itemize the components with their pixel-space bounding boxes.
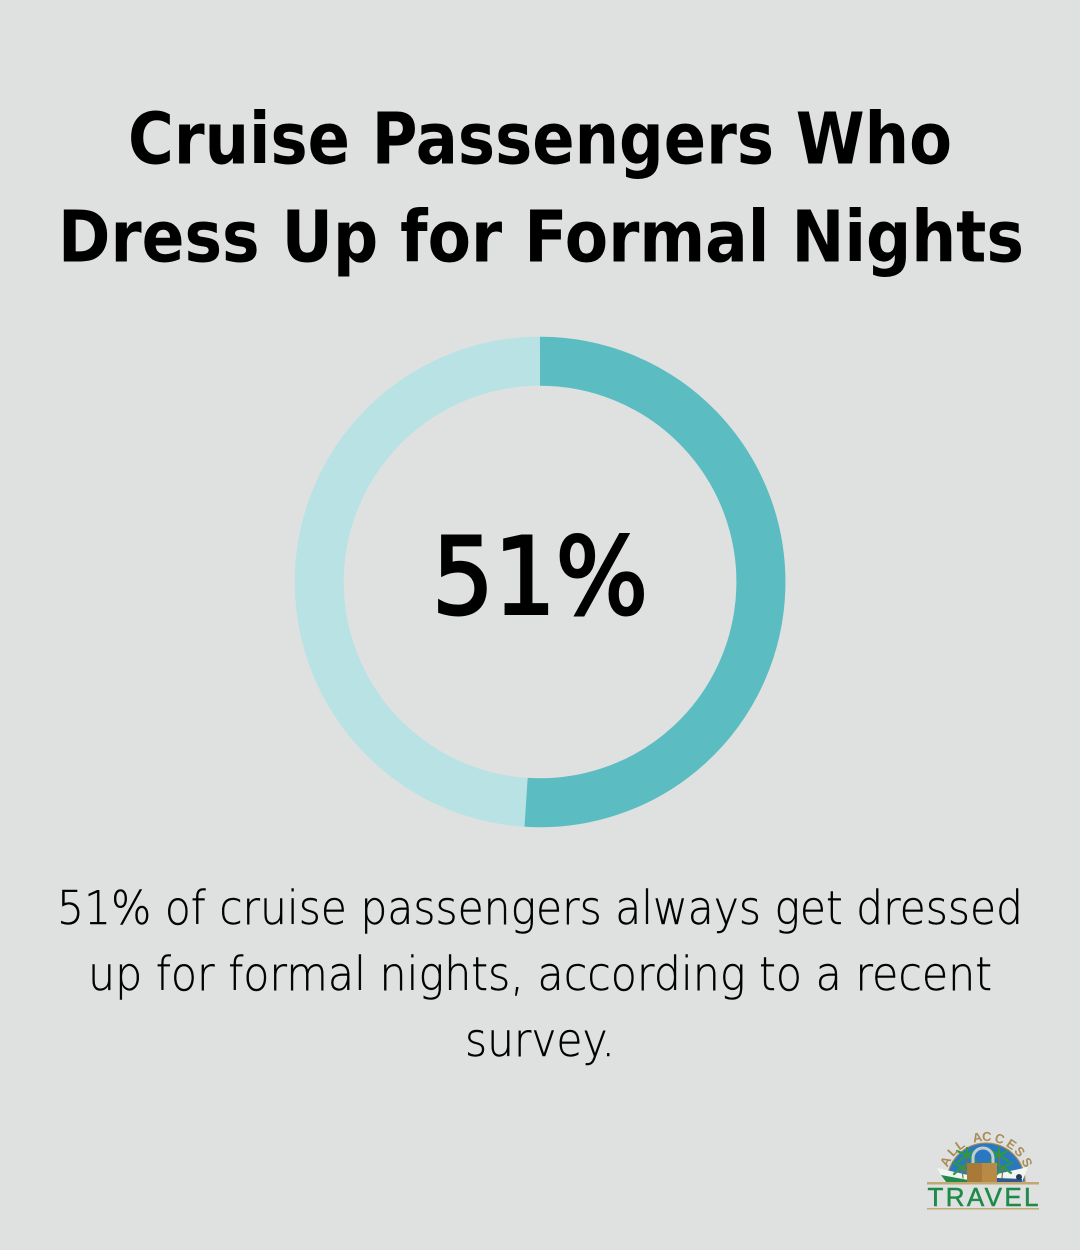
logo arc lettering: S <box>1018 1155 1036 1170</box>
description text: up for formal nights, according to a recent <box>88 947 992 1001</box>
logo arc lettering: A <box>971 1129 984 1146</box>
logo boats <box>937 1167 1028 1182</box>
logo palm trees <box>953 1148 1012 1178</box>
title <box>58 98 1024 278</box>
logo arc lettering: L <box>952 1136 967 1153</box>
logo dome with sky <box>947 1143 1025 1182</box>
logo arc lettering: S <box>1011 1143 1029 1160</box>
logo arc lettering: A <box>937 1153 955 1169</box>
logo arc lettering: L <box>944 1143 961 1159</box>
donut chart: 51 percent <box>319 361 761 803</box>
title: Cruise Passengers Who <box>128 98 952 180</box>
logo arc lettering: C <box>982 1129 992 1144</box>
donut centre value: 51% <box>432 516 648 638</box>
logo arc lettering: E <box>1004 1136 1020 1153</box>
logo padlock <box>967 1148 997 1182</box>
logo arc lettering <box>937 1129 1036 1170</box>
description text: survey. <box>465 1013 615 1067</box>
logo rules <box>927 1182 1039 1184</box>
logo: All Access Travel <box>927 1129 1039 1212</box>
logo arc lettering: C <box>993 1130 1007 1147</box>
description text <box>57 881 1023 1067</box>
logo wordmark: TRAVEL <box>928 1182 1038 1212</box>
